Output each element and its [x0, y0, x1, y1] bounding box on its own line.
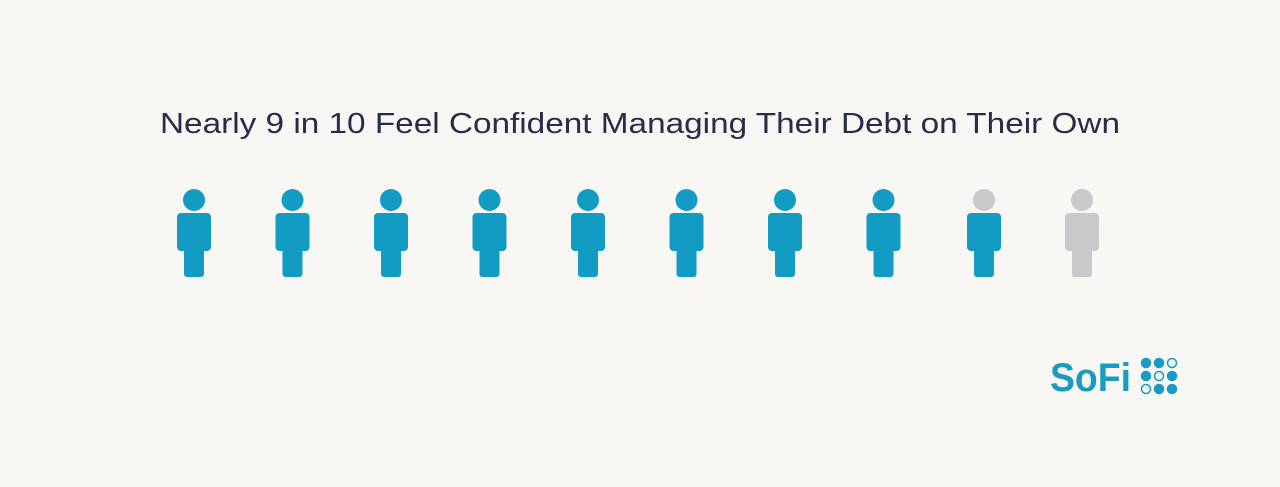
icon: person 4	[472, 189, 506, 277]
icon: person 1	[177, 189, 211, 277]
icon: person 5	[571, 189, 605, 277]
icon: person 8	[866, 189, 900, 277]
title: Nearly 9 in 10 Feel Confident Managing Their Debt on Their Own	[160, 108, 1120, 140]
icon: person 7	[768, 189, 802, 277]
icon: person 2	[276, 189, 310, 277]
icon: person 3	[374, 189, 408, 277]
icon: person 10 gray	[1065, 189, 1099, 277]
pictogram: 9 of 10 people	[177, 189, 1099, 277]
logo: SoFi: SoFi	[1050, 356, 1131, 400]
icon: person 9 partial	[967, 189, 1001, 277]
icon: person 6	[670, 189, 704, 277]
icon: logo dots	[1142, 358, 1176, 394]
logo: SoFi	[1050, 356, 1176, 400]
